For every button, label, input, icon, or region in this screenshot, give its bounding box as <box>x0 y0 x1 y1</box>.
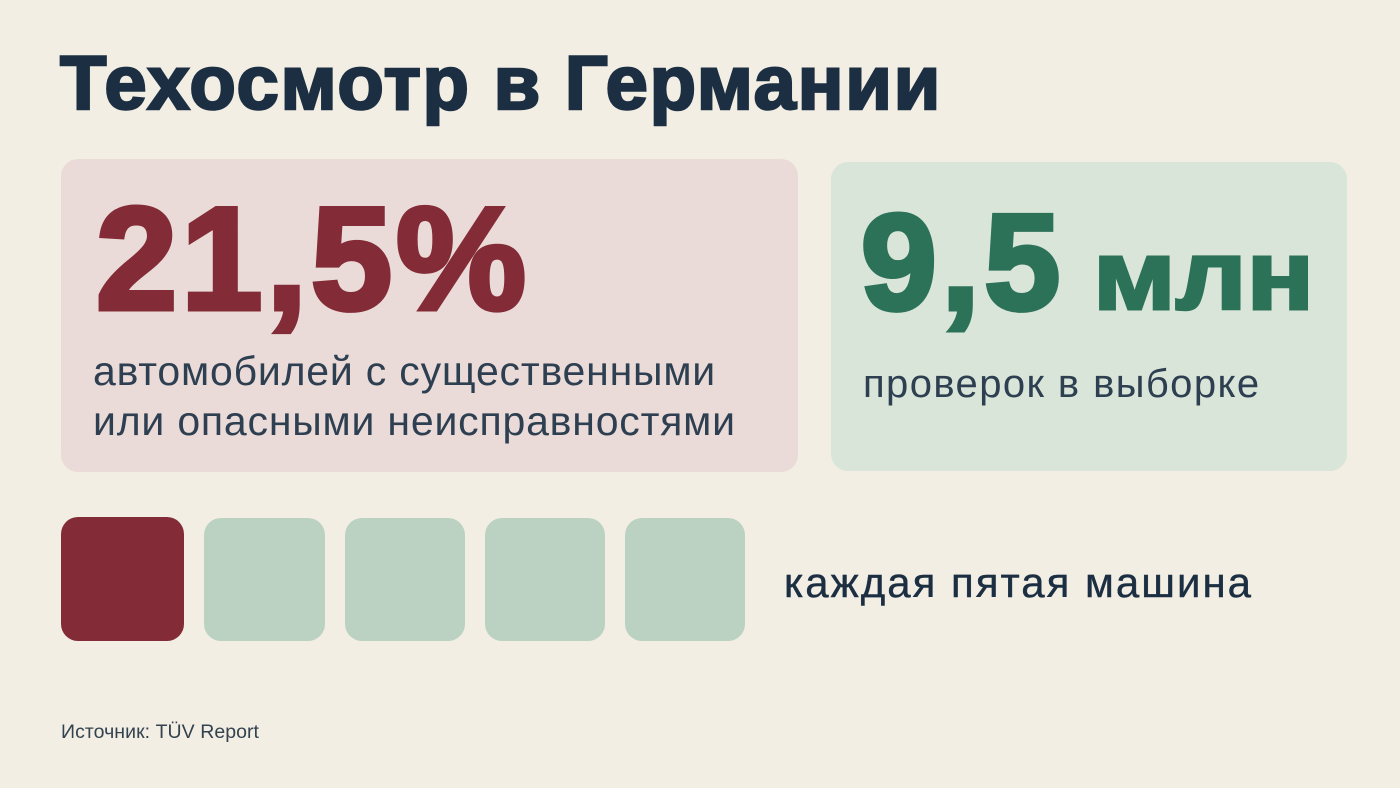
big number: 9,5 млн: млн <box>1093 220 1314 330</box>
square: car 2 <box>204 518 325 641</box>
one in five label: каждая пятая машина <box>784 559 1253 606</box>
square: car 3 <box>345 518 465 641</box>
sample description: проверок в выборке <box>863 362 1260 406</box>
square: car 5 <box>625 518 745 641</box>
defects description: автомобилей с существенными <box>93 348 716 394</box>
panel: sample size <box>831 162 1347 471</box>
square: car 4 <box>485 518 605 641</box>
big number: 9,5 млн: 9,5 <box>861 186 1065 338</box>
defects description: или опасными неисправностями <box>93 398 736 444</box>
title: Техосмотр в Германии <box>60 41 942 126</box>
panel: defects <box>61 159 798 472</box>
square: affected car <box>61 517 184 641</box>
big number: 21,5%: 21,5% <box>96 177 530 340</box>
big number: 9,5 млн <box>861 186 1314 338</box>
one in five squares <box>61 517 745 641</box>
source: Источник: TÜV Report <box>61 721 259 743</box>
defects description <box>93 348 736 444</box>
